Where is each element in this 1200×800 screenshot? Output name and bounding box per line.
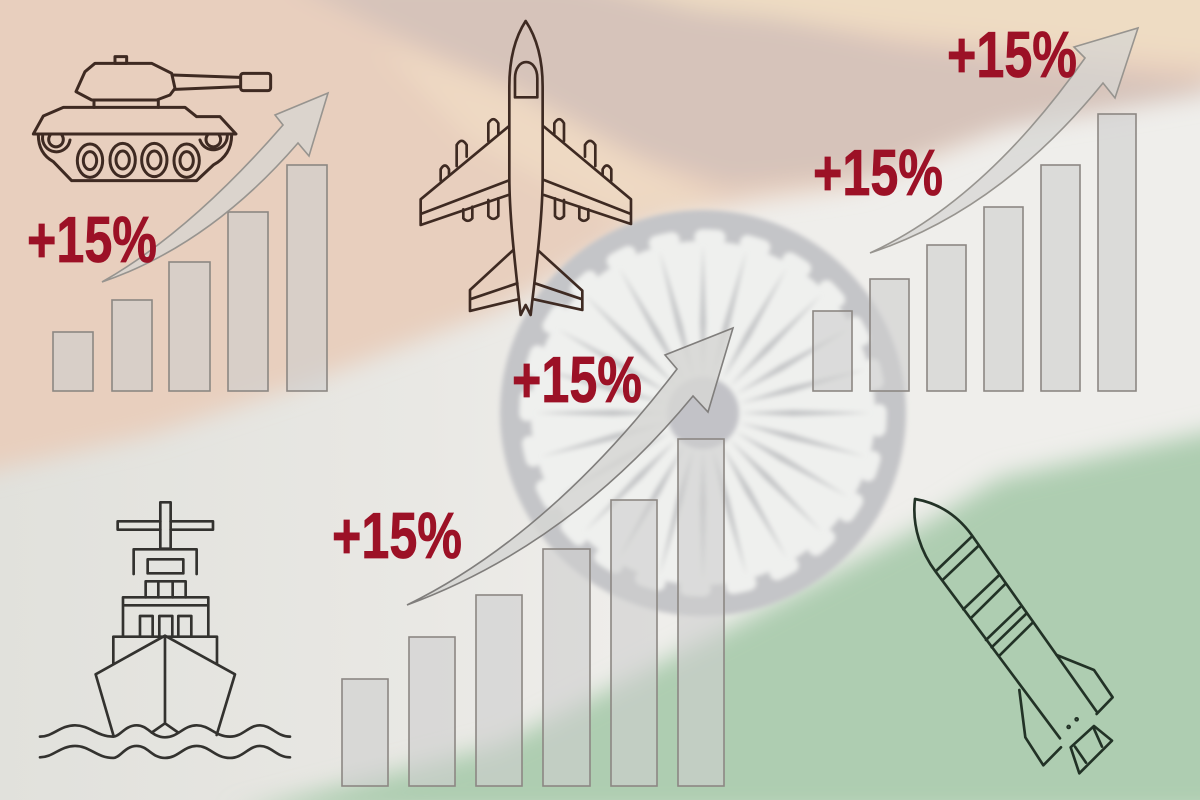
label: +15% right upper: +15% bbox=[947, 18, 1077, 91]
growth arrow: top left bbox=[102, 93, 328, 282]
icon: warship bbox=[40, 502, 290, 758]
bar chart: top right bbox=[813, 114, 1136, 391]
growth arrow: bottom centre bbox=[407, 328, 733, 605]
label: +15% bottom upper: +15% bbox=[512, 343, 642, 416]
ashoka chakra wheel bbox=[500, 210, 906, 616]
bar chart: bottom centre bbox=[342, 439, 724, 786]
icon: tank bbox=[33, 57, 271, 181]
growth arrow: top right bbox=[870, 28, 1138, 253]
label: +15% tank: +15% bbox=[27, 203, 157, 276]
label: +15% right lower: +15% bbox=[813, 136, 943, 209]
icon: fighter plane bbox=[421, 21, 631, 315]
icon: missile bbox=[914, 499, 1113, 773]
label: +15% bottom left: +15% bbox=[332, 499, 462, 572]
bar chart: top left bbox=[53, 165, 327, 391]
